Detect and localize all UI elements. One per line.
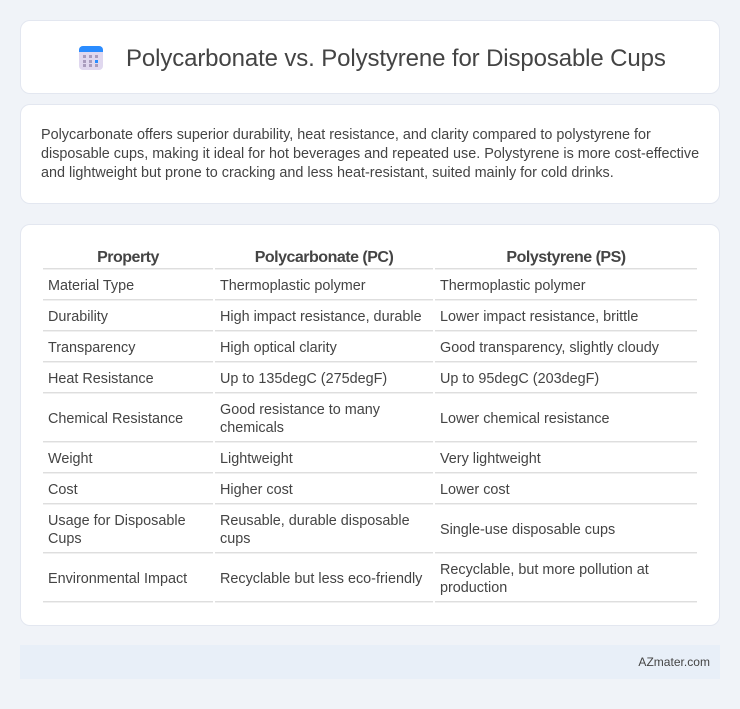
- row: durability: High impact resistance, durable: [220, 309, 422, 325]
- row: material type: Material Type: [48, 278, 134, 294]
- row: usage: Single-use disposable cups: [440, 522, 615, 538]
- row: cost: Cost: [48, 482, 78, 498]
- table header: Property: [97, 249, 159, 266]
- row: material type: Thermoplastic polymer: [220, 278, 366, 294]
- table header: Polystyrene (PS): [506, 249, 626, 266]
- title: Polycarbonate vs. Polystyrene for Disposable Cups: [126, 45, 666, 72]
- row: transparency: Good transparency, slightly cloudy: [440, 340, 659, 356]
- footer bar: [20, 645, 720, 679]
- row: weight: Weight: [48, 451, 93, 467]
- summary text: and lightweight but prone to cracking and less heat-resistant, suited mainly for cold drinks.: [41, 165, 614, 181]
- row: cost: [48, 482, 510, 498]
- row: environmental impact: production: [440, 580, 507, 596]
- row: chemical resistance: Lower chemical resistance: [440, 411, 610, 427]
- footer credit: AZmater.com: [638, 655, 710, 669]
- row: chemical resistance: chemicals: [220, 420, 284, 436]
- row: cost: Higher cost: [220, 482, 293, 498]
- row: durability: Durability: [48, 309, 108, 325]
- row: material type: [48, 278, 586, 294]
- comparison table: [43, 249, 697, 603]
- table header: [97, 249, 626, 266]
- row: durability: [48, 309, 638, 325]
- panel: comparison table: [20, 224, 720, 626]
- row: usage: cups: [220, 531, 250, 547]
- row: heat resistance: Heat Resistance: [48, 371, 154, 387]
- panel: summary: [20, 104, 720, 204]
- row: chemical resistance: Good resistance to many: [220, 402, 380, 418]
- table header: Polycarbonate (PC): [255, 249, 393, 266]
- row: material type: Thermoplastic polymer: [440, 278, 586, 294]
- row: environmental impact: Recyclable but less eco-friendly: [220, 571, 422, 587]
- summary text: [41, 127, 699, 181]
- row: environmental impact: Recyclable, but more pollution at: [440, 562, 649, 578]
- summary text: Polycarbonate offers superior durability, heat resistance, and clarity compared to polystyrene for: [41, 127, 651, 143]
- row: chemical resistance: [48, 402, 610, 436]
- row: environmental impact: Environmental Impact: [48, 571, 187, 587]
- row: usage: Cups: [48, 531, 82, 547]
- row: usage: Reusable, durable disposable: [220, 513, 410, 529]
- row: transparency: High optical clarity: [220, 340, 337, 356]
- row: usage: Usage for Disposable: [48, 513, 186, 529]
- icon: calendar: [79, 46, 103, 70]
- summary text: disposable cups, making it ideal for hot beverages and repeated use. Polystyrene is more cost-effective: [41, 146, 699, 162]
- row: weight: [48, 451, 541, 467]
- row: weight: Very lightweight: [440, 451, 541, 467]
- row: transparency: [48, 340, 659, 356]
- row: heat resistance: Up to 95degC (203degF): [440, 371, 599, 387]
- row: chemical resistance: Chemical Resistance: [48, 411, 183, 427]
- row: weight: Lightweight: [220, 451, 293, 467]
- row: usage: [48, 513, 615, 547]
- row: heat resistance: [48, 371, 599, 387]
- row: heat resistance: Up to 135degC (275degF): [220, 371, 387, 387]
- row: environmental impact: [48, 562, 649, 596]
- row: cost: Lower cost: [440, 482, 510, 498]
- panel: title card: [20, 20, 720, 94]
- row: transparency: Transparency: [48, 340, 135, 356]
- row: durability: Lower impact resistance, brittle: [440, 309, 638, 325]
